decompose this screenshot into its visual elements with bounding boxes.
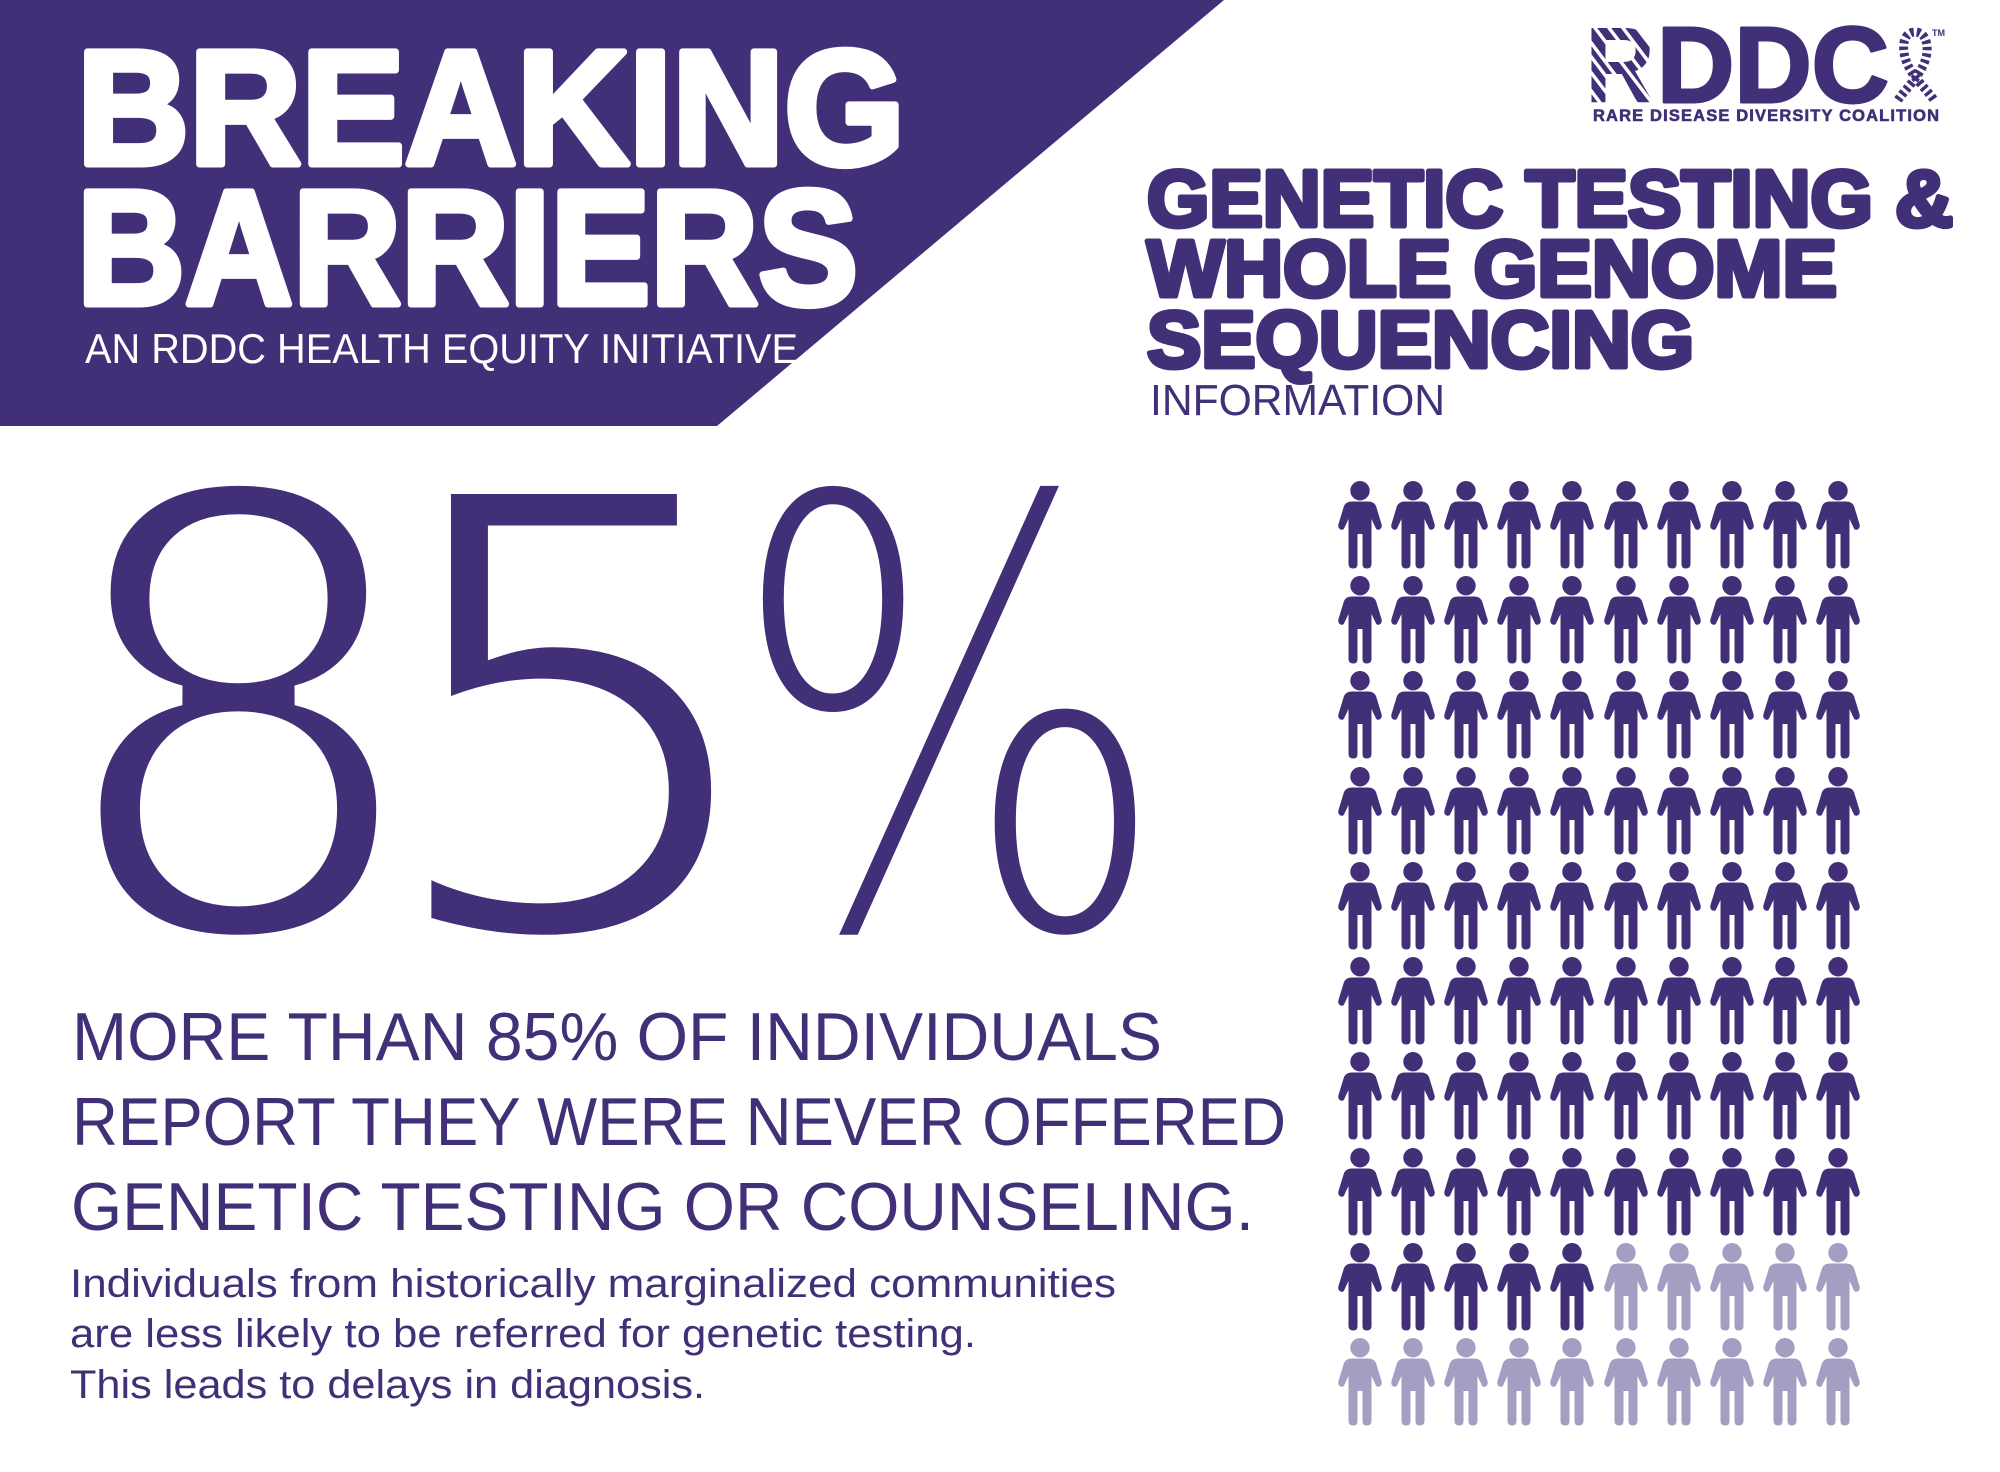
big number 85% [51, 362, 1168, 1083]
title: BARRIERS [77, 156, 858, 339]
heading: genetic testing: SEQUENCING [1147, 295, 1694, 384]
row 8 [1338, 1148, 1860, 1236]
trademark: TM [1932, 28, 1945, 38]
title: BREAKING [77, 16, 905, 199]
row 3 [1338, 671, 1860, 758]
row 1 [1338, 481, 1860, 568]
statement: MORE THAN 85% OF INDIVIDUALS [72, 999, 1162, 1075]
row 5 [1338, 862, 1860, 950]
logo letters DDC: DDC [1657, 4, 1889, 125]
big number 85%: % [730, 362, 1168, 1083]
row 2 [1338, 576, 1860, 664]
row 7 [1338, 1052, 1860, 1140]
supporting text [70, 1262, 1116, 1407]
row 6 [1338, 957, 1860, 1044]
supporting text: Individuals from historically marginalized communities [70, 1262, 1116, 1306]
logo [1580, 4, 1945, 125]
big number 85%: 8 [51, 362, 426, 1083]
logo tagline: RARE DISEASE DIVERSITY COALITION [1593, 107, 1939, 125]
row 4 [1338, 767, 1860, 854]
logo letter R with stripes: R [1585, 4, 1655, 125]
title [77, 16, 905, 339]
big number 85%: 5 [372, 362, 777, 1083]
row 10 [1338, 1338, 1860, 1426]
supporting text: are less likely to be referred for genetic testing. [70, 1312, 976, 1356]
statement: REPORT THEY WERE NEVER OFFERED [72, 1084, 1286, 1160]
statement [71, 999, 1286, 1245]
statement: GENETIC TESTING OR COUNSELING. [71, 1169, 1254, 1245]
icon: ribbon [1898, 32, 1934, 100]
information label: INFORMATION [1150, 376, 1445, 425]
supporting text: This leads to delays in diagnosis. [70, 1363, 705, 1407]
heading: genetic testing: WHOLE GENOME [1147, 224, 1837, 313]
row 9 [1338, 1243, 1860, 1330]
pictogram chart: 85 of 100 people [1338, 481, 1860, 1426]
heading: genetic testing [1147, 154, 1953, 384]
banner background [0, 0, 1224, 426]
subtitle: AN RDDC HEALTH EQUITY INITIATIVE [85, 325, 798, 372]
heading: genetic testing: GENETIC TESTING & [1147, 154, 1953, 243]
